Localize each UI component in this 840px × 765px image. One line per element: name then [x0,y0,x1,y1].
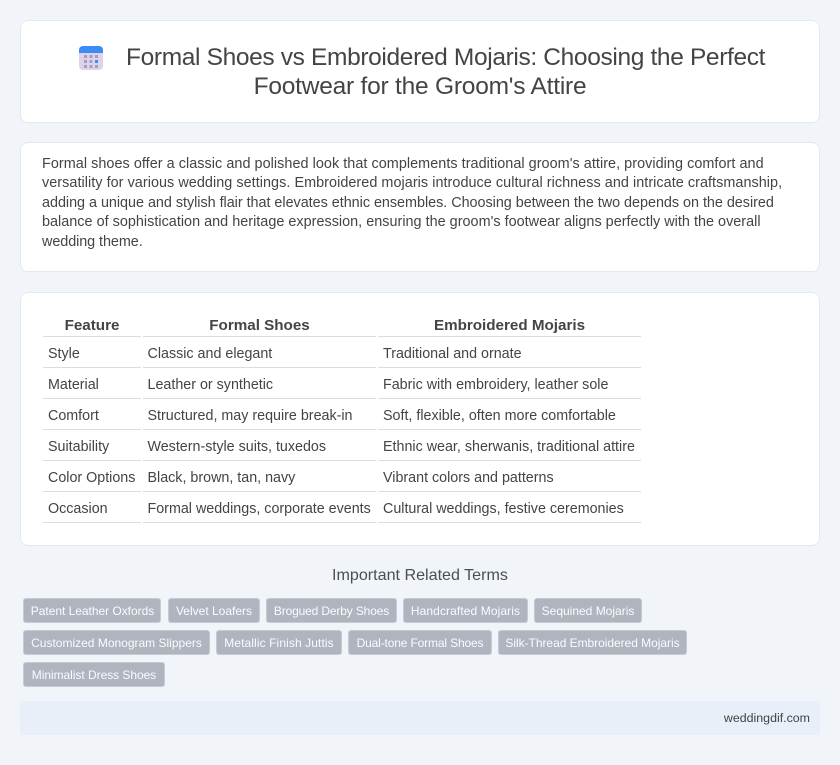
icon: calendar [79,46,103,70]
comparison table [43,317,641,523]
comparison table: Embroidered Mojaris [434,317,585,334]
comparison table: Structured, may require break-in [148,408,353,424]
intro text block: adding a unique and stylish flair that elevates ethnic ensembles. Choosing between the two depends on the desired [42,195,774,211]
comparison table: Cultural weddings, festive ceremonies [383,501,624,517]
comparison table: Ethnic wear, sherwanis, traditional attire [383,439,635,455]
comparison table: Soft, flexible, often more comfortable [383,408,616,424]
comparison table: Formal weddings, corporate events [148,501,371,517]
comparison table: Color Options [48,470,135,486]
related terms tags: Silk-Thread Embroidered Mojaris [505,636,680,650]
related terms tags: Brogued Derby Shoes [274,604,389,618]
comparison table: Fabric with embroidery, leather sole [383,377,608,393]
comparison table: Classic and elegant [148,346,272,362]
panel: title card [20,20,820,123]
comparison table: Suitability [48,439,109,455]
comparison table: Occasion [48,501,108,517]
comparison table: Material [48,377,99,393]
title: Footwear for the Groom's Attire [254,73,586,100]
comparison table: Vibrant colors and patterns [383,470,554,486]
related terms tags: Minimalist Dress Shoes [32,668,156,682]
footer [20,701,820,735]
panel: comparison table card [20,292,820,546]
related terms tags: Sequined Mojaris [542,604,634,618]
comparison table: Comfort [48,408,99,424]
intro text block: Formal shoes offer a classic and polished look that complements traditional groom's attire, providing comfort and [42,156,764,172]
comparison table: Feature [65,317,119,334]
intro text block: versatility for various wedding settings. Embroidered mojaris introduce cultural richness and intricate craftsmanship, [42,175,782,191]
intro text block: wedding theme. [42,234,143,250]
title [126,44,766,100]
related terms tags: Metallic Finish Juttis [224,636,334,650]
intro text block: balance of sophistication and heritage expression, ensuring the groom's footwear aligns perfectly with the overall [42,214,761,230]
comparison table: Style [48,346,80,362]
intro text block [42,156,782,250]
comparison table: Leather or synthetic [148,377,273,393]
comparison table: Traditional and ornate [383,346,522,362]
related terms tags [23,598,687,687]
related terms tags: Dual-tone Formal Shoes [357,636,483,650]
comparison table: Formal Shoes [209,317,310,334]
panel: intro card [20,142,820,272]
related terms tags: Velvet Loafers [176,604,252,618]
heading: related terms: Important Related Terms [332,566,508,584]
related terms tags: Customized Monogram Slippers [31,636,202,650]
title: Formal Shoes vs Embroidered Mojaris: Choosing the Perfect [126,44,765,71]
related terms tags: Handcrafted Mojaris [411,604,520,618]
related terms tags: Patent Leather Oxfords [31,604,154,618]
comparison table: Western-style suits, tuxedos [148,439,326,455]
comparison table: Black, brown, tan, navy [148,470,295,486]
footer: weddingdif.com [724,711,810,725]
